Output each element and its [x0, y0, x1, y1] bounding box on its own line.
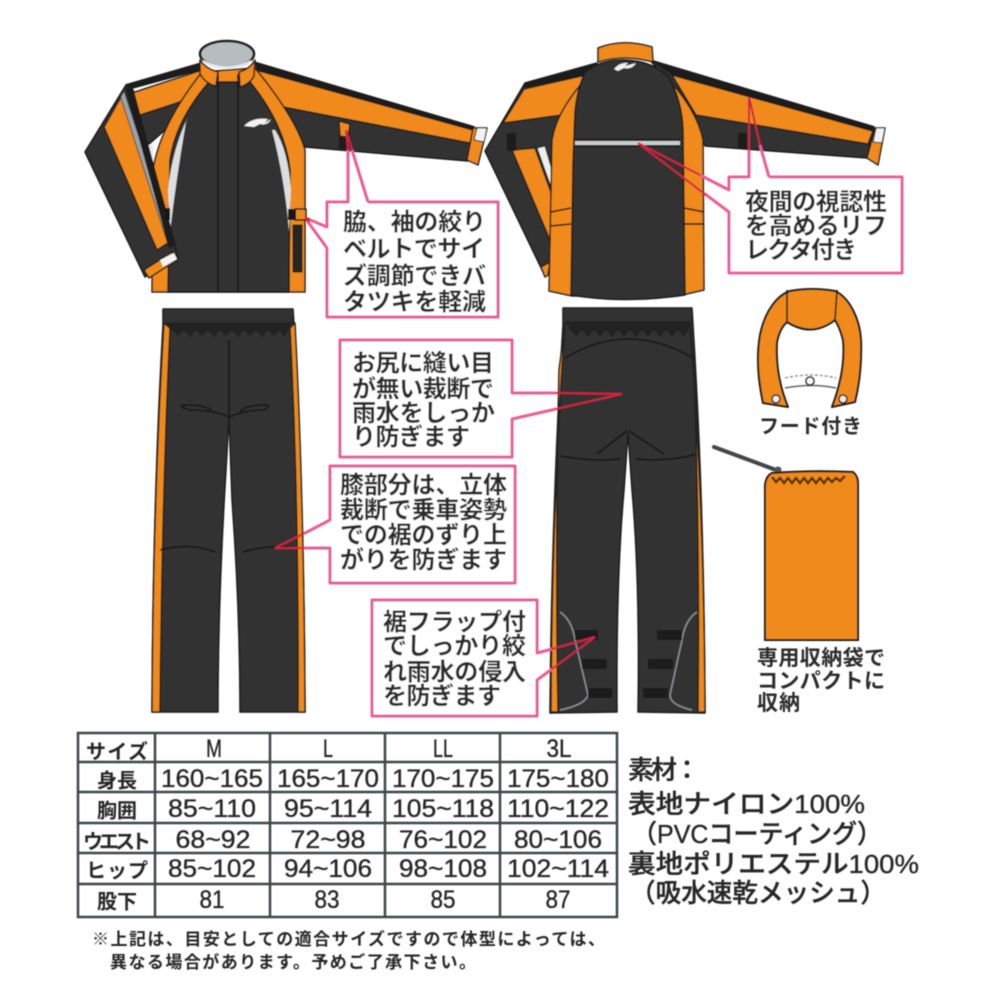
callout outline [340, 340, 556, 457]
callout text: タツキを軽減 [343, 282, 486, 317]
row: hip: ヒップ [86, 854, 148, 884]
row: height: 165~170 [277, 765, 379, 793]
row: chest [97, 794, 609, 824]
waistband [163, 309, 293, 323]
collar [200, 41, 255, 87]
waistband [563, 308, 692, 322]
pants back illustration [550, 308, 705, 713]
callout text [343, 202, 486, 317]
callout text: 夜間の視認性 [745, 182, 887, 217]
storage bag label: 収納 [757, 687, 800, 717]
row: inseam: 85 [430, 886, 456, 914]
orange stripes [551, 324, 565, 712]
materials text: （吸水速乾メッシュ） [630, 878, 886, 908]
row: inseam: 81 [200, 886, 224, 914]
back collar [598, 43, 653, 62]
jacket body [152, 68, 306, 292]
row: hip: 98~108 [399, 855, 487, 883]
callout text: ズ調節できバ [343, 256, 486, 291]
row: waist [83, 826, 602, 854]
row: hip [86, 854, 609, 884]
callout: reflector [638, 97, 902, 273]
callout text [383, 602, 526, 711]
callout outline [700, 145, 902, 273]
row: chest: 105~118 [392, 795, 494, 823]
row: height: 160~165 [161, 765, 263, 793]
materials text: （PVCコーティング） [632, 819, 882, 849]
back right sleeve [650, 60, 885, 165]
table header row: L [323, 735, 333, 763]
materials text: 裏地ポリエステル100% [628, 849, 919, 879]
back left sleeve [485, 63, 597, 277]
row: chest: 胸囲 [97, 794, 137, 824]
callout text: を高めるリフ [745, 206, 887, 241]
callout outline [305, 466, 515, 583]
callout text: 膝部分は、立体 [340, 465, 507, 500]
logo [244, 119, 271, 127]
callout text: ベルトでサイ [343, 229, 485, 264]
callout text: お尻に縫い目 [352, 343, 494, 378]
callout text [352, 343, 495, 452]
callout: knee [275, 465, 515, 583]
shoulder and underarm [121, 62, 203, 170]
footnote: 異なる場合があります。予めご了承下さい。 [110, 948, 476, 973]
back panels [549, 60, 704, 300]
table grid [78, 733, 617, 917]
row: hip: 102~114 [507, 855, 609, 883]
row: hip: 94~106 [284, 855, 372, 883]
callout text [745, 182, 887, 265]
row: waist: 72~98 [290, 826, 366, 854]
callout panel [372, 600, 537, 716]
table header row: 3L [546, 735, 572, 763]
gather [165, 323, 291, 337]
table header row: LL [433, 735, 453, 763]
storage bag label: 専用収納袋で [757, 642, 885, 672]
callout text: 裾フラップ付 [383, 602, 526, 637]
callout text: り防ぎます [352, 417, 470, 452]
icon: storage bag [714, 447, 858, 640]
table header row [86, 735, 572, 764]
right sleeve [254, 62, 487, 165]
row: height: 175~180 [507, 765, 609, 793]
footnote [92, 925, 605, 973]
callout text: での裾のずり上 [340, 515, 507, 550]
callout text: を防ぎます [383, 676, 501, 711]
callout panel [340, 340, 512, 457]
orange stripes [152, 323, 170, 712]
hood label: フード付き [759, 410, 862, 439]
row: waist: 76~102 [399, 826, 487, 854]
row: waist: 68~92 [176, 826, 250, 854]
materials text [628, 755, 919, 908]
callout: belts [305, 130, 498, 317]
callout panel [729, 177, 902, 273]
callout: hem flap [372, 600, 595, 716]
row: chest: 110~122 [507, 795, 609, 823]
row: inseam: 83 [314, 886, 340, 914]
pants front illustration [152, 309, 305, 712]
row: inseam [97, 886, 570, 914]
table header row: M [206, 735, 222, 763]
size table [78, 733, 617, 917]
callout text: 裁断で乗車姿勢 [340, 490, 507, 525]
callout text: 雨水をしっか [352, 393, 495, 428]
callout text: が無い裁断で [352, 369, 494, 404]
materials text: 素材： [628, 755, 700, 785]
storage bag label [757, 642, 885, 717]
callout text: 脇、袖の絞り [343, 202, 486, 237]
row: inseam: 股下 [97, 886, 137, 914]
row: waist: ウエスト [83, 826, 151, 854]
row: inseam: 87 [546, 886, 570, 914]
icon: hood [758, 289, 861, 407]
gather [566, 322, 690, 337]
callout outline [308, 150, 498, 317]
row: chest: 85~110 [168, 795, 256, 823]
callout text: れ雨水の侵入 [383, 652, 526, 687]
callout outline [372, 600, 552, 716]
callout text: レクタ付き [745, 230, 857, 265]
callout text: でしっかり絞 [383, 626, 526, 661]
jacket front illustration [85, 41, 487, 292]
row: height: 身長 [97, 764, 137, 794]
left sleeve [85, 85, 178, 278]
table header row: サイズ [86, 736, 148, 764]
storage bag label: コンパクトに [757, 665, 885, 695]
jacket back illustration [485, 43, 885, 299]
callout panel [330, 466, 515, 583]
row: height: 170~175 [392, 765, 494, 793]
callout text: がりを防ぎます [340, 540, 507, 575]
callout text [340, 465, 507, 575]
footnote: ※上記は、目安としての適合サイズですので体型によっては、 [92, 925, 605, 950]
callout panel [327, 202, 498, 317]
callout: seat [340, 340, 622, 457]
row: height [97, 764, 609, 794]
row: waist: 80~106 [514, 826, 602, 854]
row: hip: 85~102 [168, 855, 256, 883]
materials text: 表地ナイロン100% [628, 789, 865, 819]
pants body [550, 308, 705, 713]
row: chest: 95~114 [284, 795, 372, 823]
pants body [152, 309, 305, 712]
